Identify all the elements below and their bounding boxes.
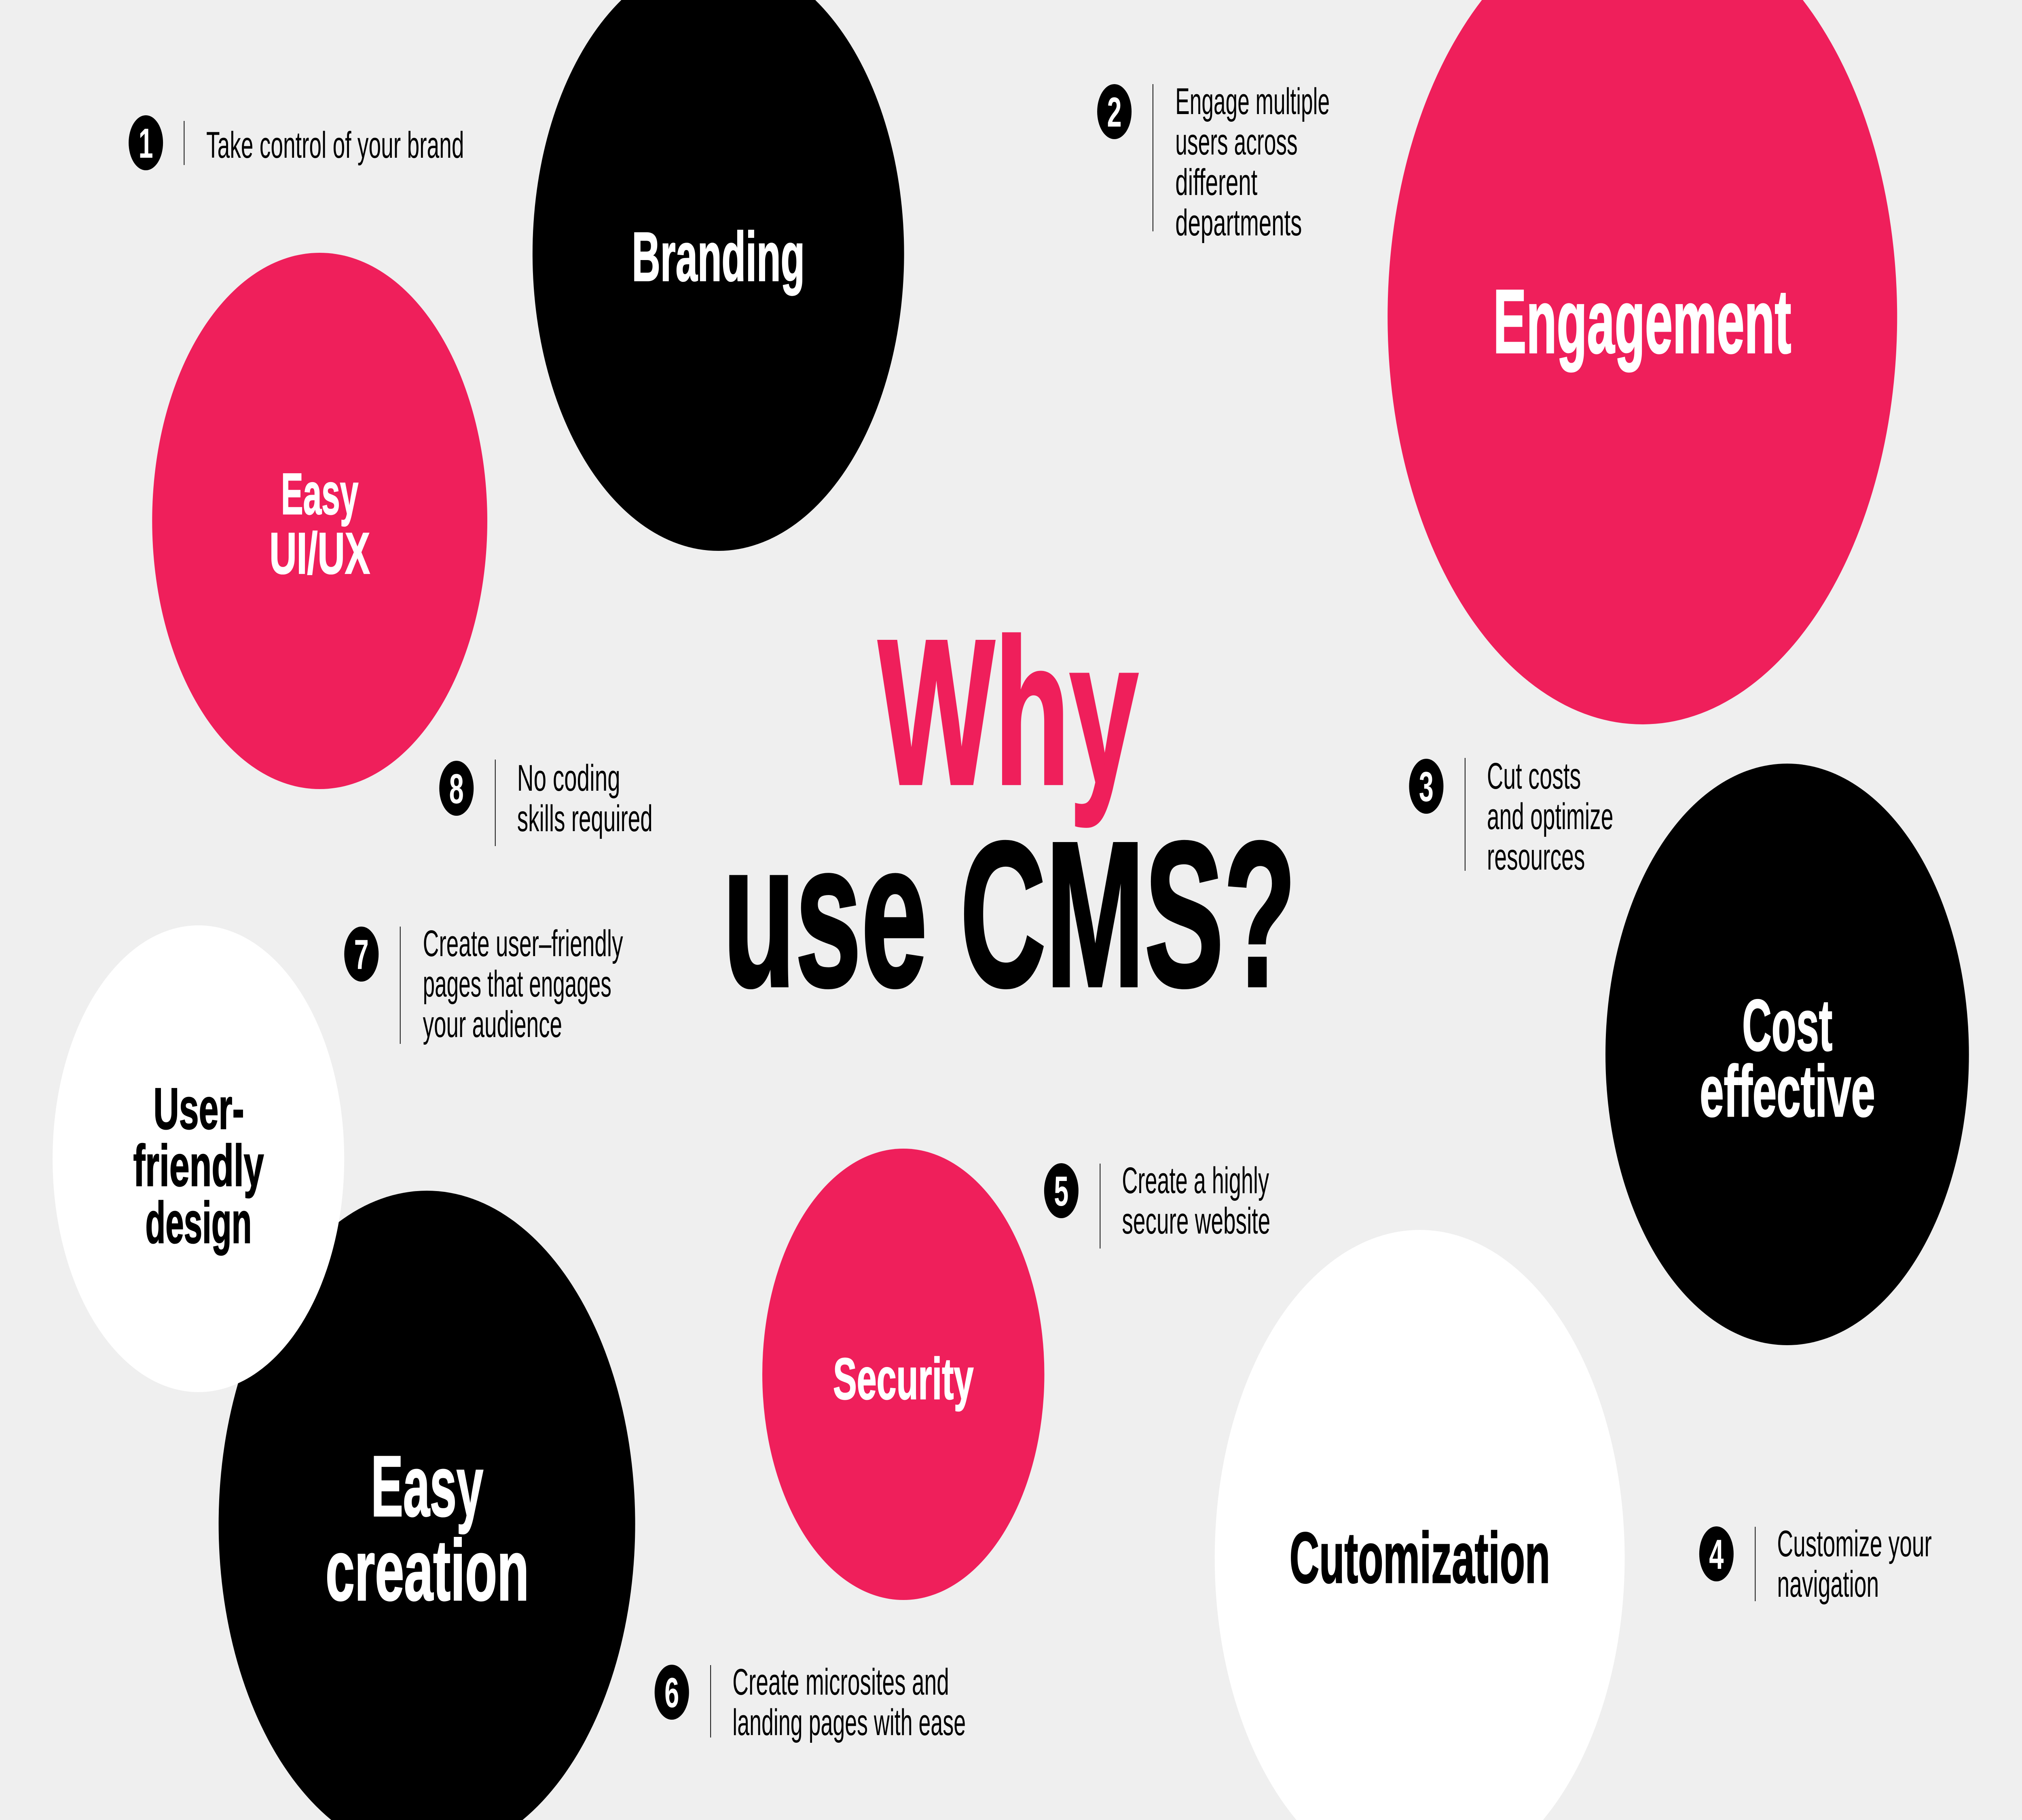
callout 5: 5 [1054,1168,1068,1215]
callout 3: resources [1487,836,1585,878]
callout 7: Create user–friendly [423,923,623,964]
callout 5: Create a highly [1122,1160,1269,1201]
callout 3: Cut costs [1487,756,1581,797]
callout 8: No coding [517,758,620,799]
circle: Cost effective: Cost [1742,984,1832,1066]
callout 4: 4 [1709,1531,1724,1578]
circle: Easy creation: creation [326,1522,529,1619]
circle: Security: Security [833,1346,974,1412]
callout 1: Take control of your brand [206,125,464,166]
circle: Branding: Branding [632,218,805,296]
callout 6: landing pages with ease [732,1702,966,1743]
callout 6 [655,1661,966,1743]
callout 7: 7 [354,931,369,978]
callout 4: Customize your [1777,1523,1932,1564]
circle: User-friendly design: friendly [133,1133,264,1198]
circle: User-friendly design: User- [153,1076,244,1141]
callout 2: users across [1175,121,1298,163]
circle: Easy UI/UX: Easy [281,461,358,527]
circle: Engagement: Engagement [1493,271,1791,372]
callout 8 [439,758,653,846]
circle: Security [762,1149,1044,1600]
callout 6: Create microsites and [732,1661,949,1703]
callout 5: secure website [1122,1200,1270,1242]
title: Why [878,597,1139,829]
circle: Cost effective [1605,764,1969,1345]
callout 7: your audience [423,1004,562,1045]
callout 7 [344,923,623,1045]
circle: Easy creation: Easy [371,1438,483,1534]
callout 7: pages that engages [423,963,611,1005]
title [723,597,1296,1030]
callout 8: 8 [449,765,464,813]
circle: Customization [1215,1230,1624,1820]
circle: Branding [533,0,904,551]
circle: Engagement [1387,0,1897,724]
callout 3: and optimize [1487,796,1613,837]
callout 6: 6 [664,1669,679,1716]
callout 2 [1097,81,1330,243]
circle: User-friendly design [53,925,344,1392]
callout 2: 2 [1107,89,1122,136]
callout 2: different [1175,162,1257,203]
callout 4 [1699,1523,1932,1605]
callout 1: 1 [139,120,153,167]
title: use CMS? [723,799,1296,1030]
callout 3: 3 [1419,763,1434,811]
circle: Easy creation [219,1191,635,1820]
callout 2: departments [1175,202,1302,243]
callout 4: navigation [1777,1564,1879,1605]
circle: Cost effective: effective [1700,1050,1875,1132]
circle: Easy UI/UX: UI/UX [269,521,370,586]
circle: User-friendly design: design [145,1190,252,1255]
callout 5 [1044,1160,1270,1249]
circle: Easy UI/UX [152,253,487,789]
callout 1 [129,115,464,170]
circle: Customization: Cutomization [1290,1518,1550,1598]
callout 3 [1409,756,1613,878]
callout 8: skills required [517,798,653,839]
callout 2: Engage multiple [1175,81,1330,122]
